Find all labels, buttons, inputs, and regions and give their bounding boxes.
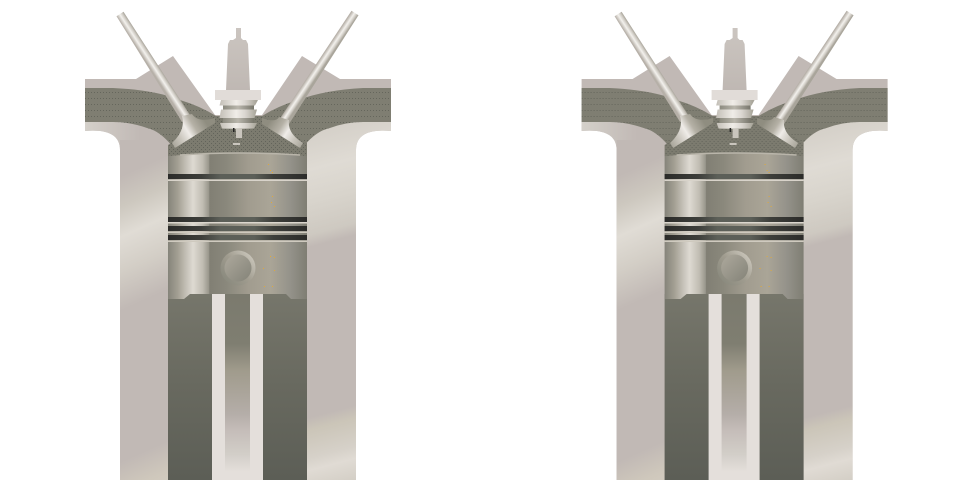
panel: left engine cylinder [85,11,391,480]
piston [168,153,307,299]
left valve [116,12,215,148]
piston highlights [760,164,772,287]
piston highlights [263,164,275,287]
connecting rod [665,294,804,480]
cylinder head and walls [582,56,888,480]
piston rings [168,174,307,242]
panel: right engine cylinder [582,11,888,480]
intake port [85,88,216,146]
wrist pin [717,250,752,286]
spark plug [712,28,758,145]
intake port [582,88,713,146]
piston [665,153,804,299]
cylinder head and walls [85,56,391,480]
spark plug [215,28,261,145]
right valve [757,11,854,148]
left valve [615,12,713,148]
exhaust port [262,88,391,146]
combustion chamber [168,116,307,156]
wrist pin [220,250,256,286]
right valve [262,11,358,148]
connecting rod [168,294,307,480]
combustion chamber [665,116,804,156]
piston rings [665,174,804,242]
exhaust port [759,88,888,146]
